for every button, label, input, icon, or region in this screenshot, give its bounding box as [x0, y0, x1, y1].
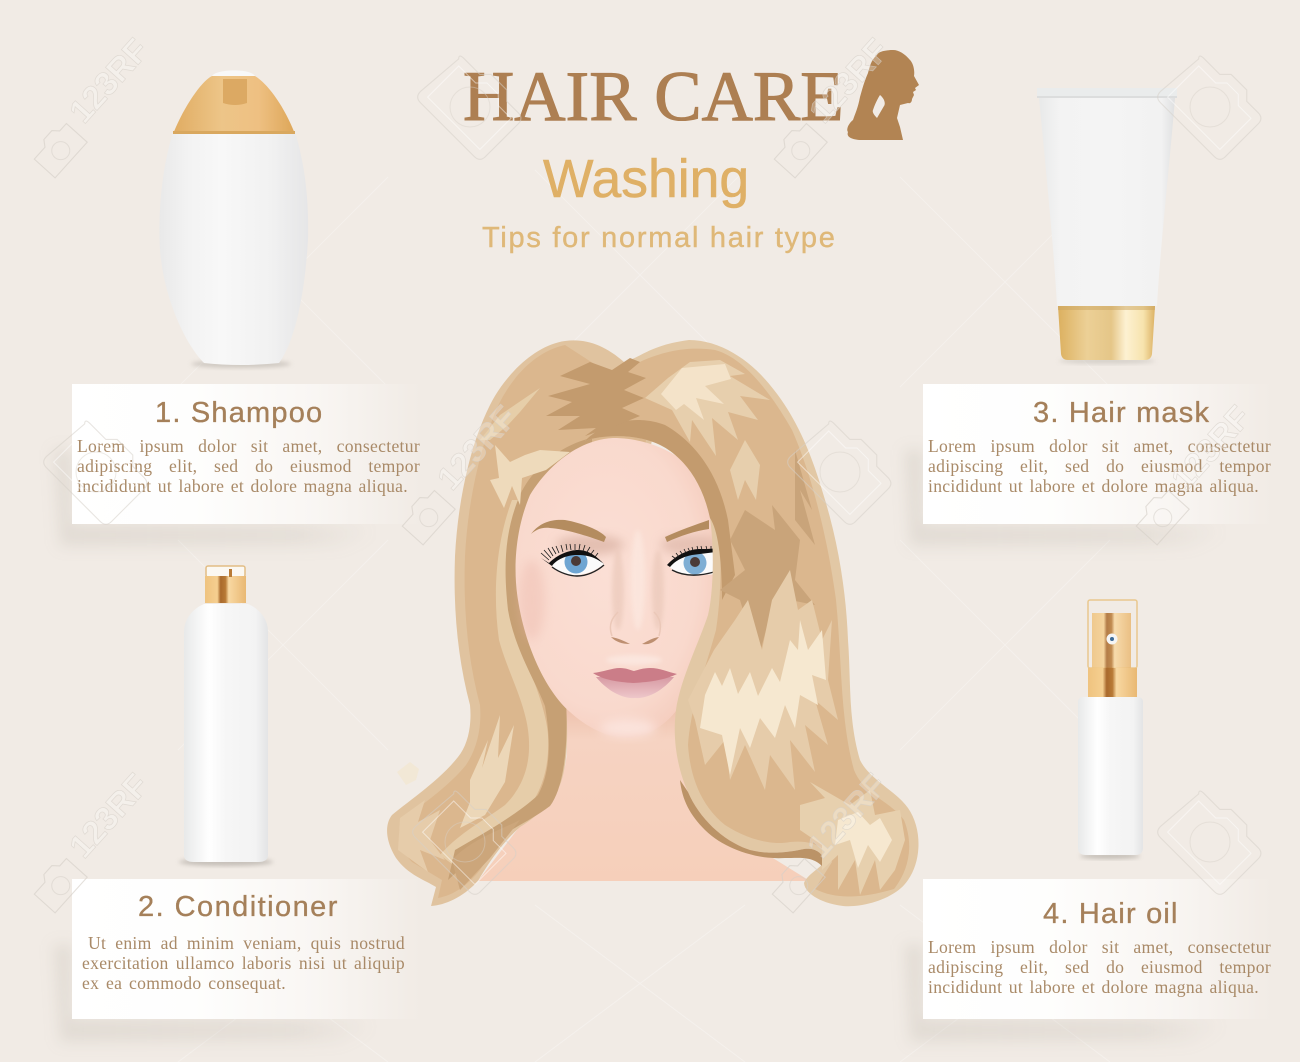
text: Hair mask body: incididunt ut labore et dolore magna aliqua. [928, 476, 1259, 496]
watermark stamps: 123RF [800, 766, 893, 865]
panel shadows [54, 450, 1225, 1042]
icon: small sparkle by hair [397, 762, 419, 785]
heading: Shampoo: 1. Shampoo [155, 397, 323, 429]
product: shampoo bottle [159, 70, 308, 368]
hair: left highlights [490, 445, 570, 508]
hair: forehead highlight [645, 360, 770, 456]
watermark stamps: 123RF [1164, 398, 1257, 497]
text: Hair mask body: Lorem ipsum dolor sit amet, consectetur [928, 436, 1271, 456]
eye right [667, 546, 716, 575]
product: hair mask tube [1037, 88, 1177, 364]
text: Conditioner body: Ut enim ad minim veniam, quis nostrud [88, 933, 405, 953]
watermark stamps: 123RF [62, 31, 155, 130]
hair: crown roots [546, 358, 646, 436]
text: Hair mask body [928, 436, 1271, 496]
text: Hair oil body [928, 937, 1271, 997]
lips [593, 655, 677, 698]
text: Shampoo body: incididunt ut labore et dolore magna aliqua. [77, 476, 408, 496]
eyebrow left [531, 520, 606, 542]
text: Conditioner body: exercitation ullamco laboris nisi ut aliquip [82, 953, 405, 973]
heading: Conditioner: 2. Conditioner [138, 891, 339, 923]
nose [610, 612, 660, 644]
text: Hair mask body: adipiscing elit, sed do eiusmod tempor [928, 456, 1271, 476]
face shading: blush and contour [519, 560, 545, 640]
icon: woman silhouette [847, 50, 919, 140]
text: Conditioner body: ex ea commodo consequat. [82, 973, 286, 993]
panel: 4. Hair oil [923, 879, 1271, 1019]
hair: right front sweep [585, 340, 918, 906]
heading: Hair oil: 4. Hair oil [1043, 898, 1179, 930]
subtitle: tips: Tips for normal hair type [482, 222, 837, 254]
title: HAIR CARE [463, 58, 844, 136]
hair: curl highlights [800, 782, 905, 895]
face [516, 438, 716, 738]
watermark stamps: 123RF [802, 31, 895, 130]
background lattice [178, 170, 1110, 1062]
eyebrow right [665, 520, 709, 542]
eye left [541, 544, 604, 576]
heading: Hair mask: 3. Hair mask [1033, 397, 1210, 429]
panel: 1. Shampoo [72, 384, 420, 524]
hair: back and left side [387, 340, 660, 906]
text: Shampoo body [77, 436, 420, 496]
text: Hair oil body: Lorem ipsum dolor sit amet, consectetur [928, 937, 1271, 957]
hair: lower cream highlights [688, 570, 838, 790]
neck and shoulders [478, 700, 810, 881]
panel: 2. Conditioner [72, 879, 420, 1019]
panel: 3. Hair mask [923, 384, 1271, 524]
portrait: woman with blonde hair [387, 340, 919, 906]
hair: left dark band around face [448, 438, 592, 880]
hair: dark band above forehead [585, 420, 735, 600]
text: Conditioner body [82, 933, 405, 993]
subtitle: Washing: Washing [543, 150, 749, 209]
text: Shampoo body: adipiscing elit, sed do eiusmod tempor [77, 456, 420, 476]
hair: mid dark strands [720, 505, 815, 660]
text: Shampoo body: Lorem ipsum dolor sit amet, consectetur [77, 436, 420, 456]
watermark stamps: 123RF [62, 766, 155, 865]
product: conditioner bottle [179, 566, 273, 866]
watermark stamps: 123RF [430, 398, 523, 497]
text: Hair oil body: adipiscing elit, sed do eiusmod tempor [928, 957, 1271, 977]
text: Hair oil body: incididunt ut labore et dolore magna aliqua. [928, 977, 1259, 997]
hair: left lighter band [440, 500, 548, 864]
product: hair oil pump [1078, 600, 1143, 859]
